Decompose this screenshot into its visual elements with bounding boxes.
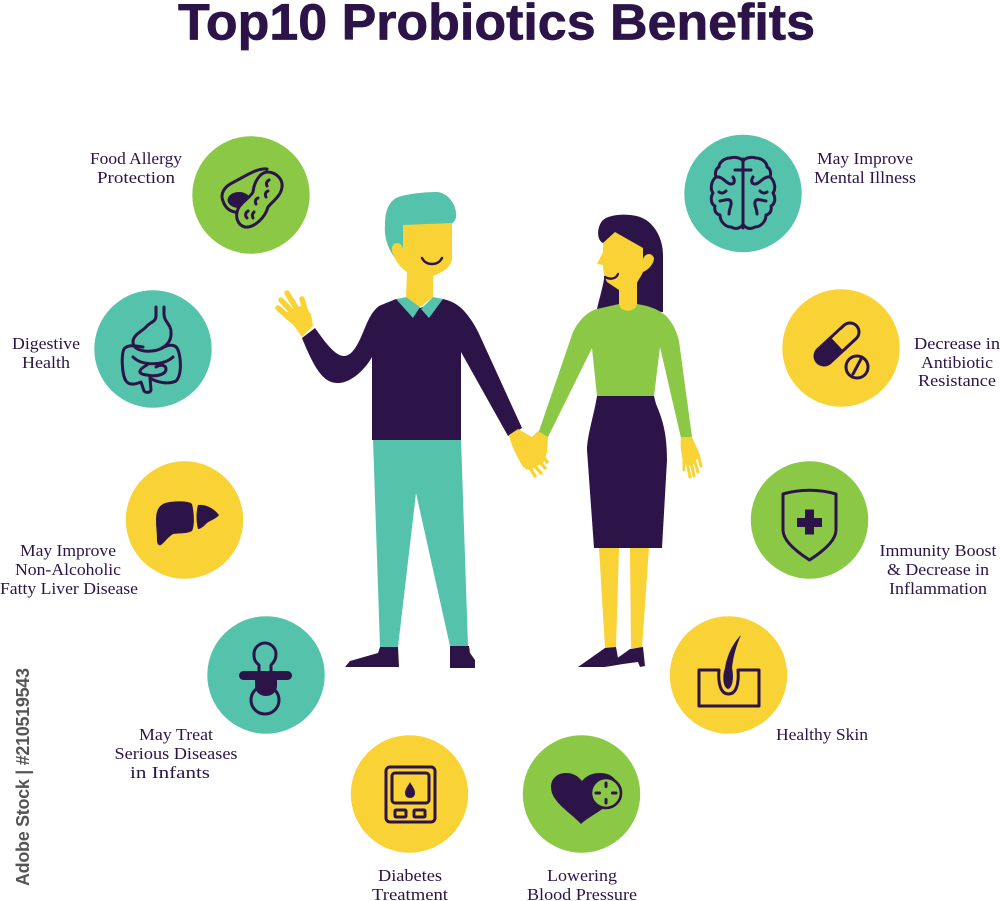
circle: mental illness bbox=[684, 135, 802, 252]
watermark pattern: Adobe Stock bbox=[110, 264, 260, 390]
icon: liver bbox=[156, 501, 219, 545]
label: mental illness: Mental Illness bbox=[814, 168, 916, 187]
label: antibiotic resistance: Antibiotic bbox=[921, 353, 993, 372]
watermark pattern: Adobe Stock bbox=[675, 109, 825, 235]
label: serious diseases: in Infants bbox=[130, 763, 210, 782]
woman figure bbox=[538, 215, 701, 667]
clasped hands bbox=[509, 429, 548, 476]
circle: infants bbox=[207, 616, 325, 734]
icon: stomach and intestines bbox=[122, 307, 180, 392]
woman skirt bbox=[587, 396, 667, 548]
woman legs bbox=[599, 548, 649, 648]
woman face and neck bbox=[597, 232, 654, 314]
woman free hand bbox=[681, 437, 701, 477]
man hair bbox=[385, 192, 456, 262]
label: blood pressure bbox=[527, 866, 637, 901]
label: antibiotic resistance: Decrease in bbox=[914, 334, 1000, 353]
label: liver disease: May Improve bbox=[20, 541, 116, 560]
label: diabetes treatment: Diabetes bbox=[378, 866, 442, 885]
watermark pattern: Adobe Stock bbox=[185, 449, 335, 575]
woman smile bbox=[605, 274, 618, 279]
circle: digestive health bbox=[94, 290, 212, 408]
watermark pattern bbox=[110, 109, 895, 885]
man face and neck bbox=[392, 223, 452, 307]
label: liver disease: Fatty Liver Disease bbox=[0, 579, 138, 598]
icon: peanut bbox=[222, 169, 282, 227]
woman shoes bbox=[578, 647, 645, 667]
icon: brain bbox=[711, 157, 775, 228]
circle: food allergy bbox=[192, 136, 310, 254]
man waving hand bbox=[278, 293, 313, 337]
man collar bbox=[396, 297, 443, 318]
circle: diabetes bbox=[351, 735, 468, 853]
icon: glucose meter bbox=[386, 767, 435, 822]
man smile bbox=[422, 258, 442, 264]
watermark pattern: Adobe Stock bbox=[385, 729, 535, 855]
watermark pattern: Adobe Stock bbox=[675, 659, 825, 785]
icon: hair follicle bbox=[699, 635, 759, 706]
label: mental illness bbox=[814, 149, 916, 187]
circle: blood pressure bbox=[523, 735, 640, 853]
label: diabetes treatment bbox=[372, 866, 448, 901]
stock id side text: Adobe Stock | #210519543 bbox=[13, 668, 33, 886]
label: serious diseases: Serious Diseases bbox=[114, 744, 238, 763]
label: blood pressure: Lowering bbox=[547, 866, 618, 885]
label: digestive health: Health bbox=[22, 353, 71, 372]
icon: heart with gauge bbox=[551, 773, 621, 824]
watermark pattern: Adobe Stock bbox=[265, 619, 415, 745]
woman hair bbox=[597, 215, 663, 312]
label: liver disease bbox=[0, 541, 138, 598]
woman top bbox=[538, 304, 692, 438]
label: immunity: Inflammation bbox=[889, 579, 988, 598]
label: immunity: Immunity Boost bbox=[880, 541, 997, 560]
label: digestive health: Digestive bbox=[12, 334, 80, 353]
watermark pattern: Adobe Stock bbox=[175, 139, 325, 265]
label: food allergy: Food Allergy bbox=[90, 149, 183, 168]
label: serious diseases: May Treat bbox=[139, 725, 213, 744]
label: antibiotic resistance: Resistance bbox=[918, 371, 996, 390]
man trousers bbox=[373, 439, 468, 647]
icon: shield with cross bbox=[783, 490, 836, 560]
watermark pattern: Adobe Stock bbox=[525, 759, 675, 885]
icon: pacifier bbox=[239, 643, 292, 714]
label: liver disease: Non-Alcoholic bbox=[15, 560, 121, 579]
circle: skin bbox=[670, 616, 787, 734]
circle: immunity bbox=[751, 461, 868, 579]
man sweater bbox=[302, 299, 522, 440]
label: immunity bbox=[880, 541, 997, 598]
brain right half bbox=[743, 157, 775, 228]
circle: liver bbox=[126, 461, 243, 579]
circle: antibiotics bbox=[782, 289, 900, 407]
brain left half bbox=[711, 157, 743, 228]
label: food allergy: Protection bbox=[97, 168, 176, 187]
icon: capsule and tablet bbox=[824, 332, 868, 378]
label: antibiotic resistance bbox=[914, 334, 1000, 390]
man figure bbox=[278, 192, 522, 668]
man shoes bbox=[345, 646, 475, 668]
label: serious diseases bbox=[114, 725, 238, 782]
label: mental illness: May Improve bbox=[817, 149, 913, 168]
label: healthy skin: Healthy Skin bbox=[776, 725, 869, 744]
label: food allergy bbox=[90, 149, 183, 187]
label: digestive health bbox=[12, 334, 80, 372]
watermark pattern: Adobe Stock bbox=[745, 449, 895, 575]
label: immunity: & Decrease in bbox=[887, 560, 990, 579]
